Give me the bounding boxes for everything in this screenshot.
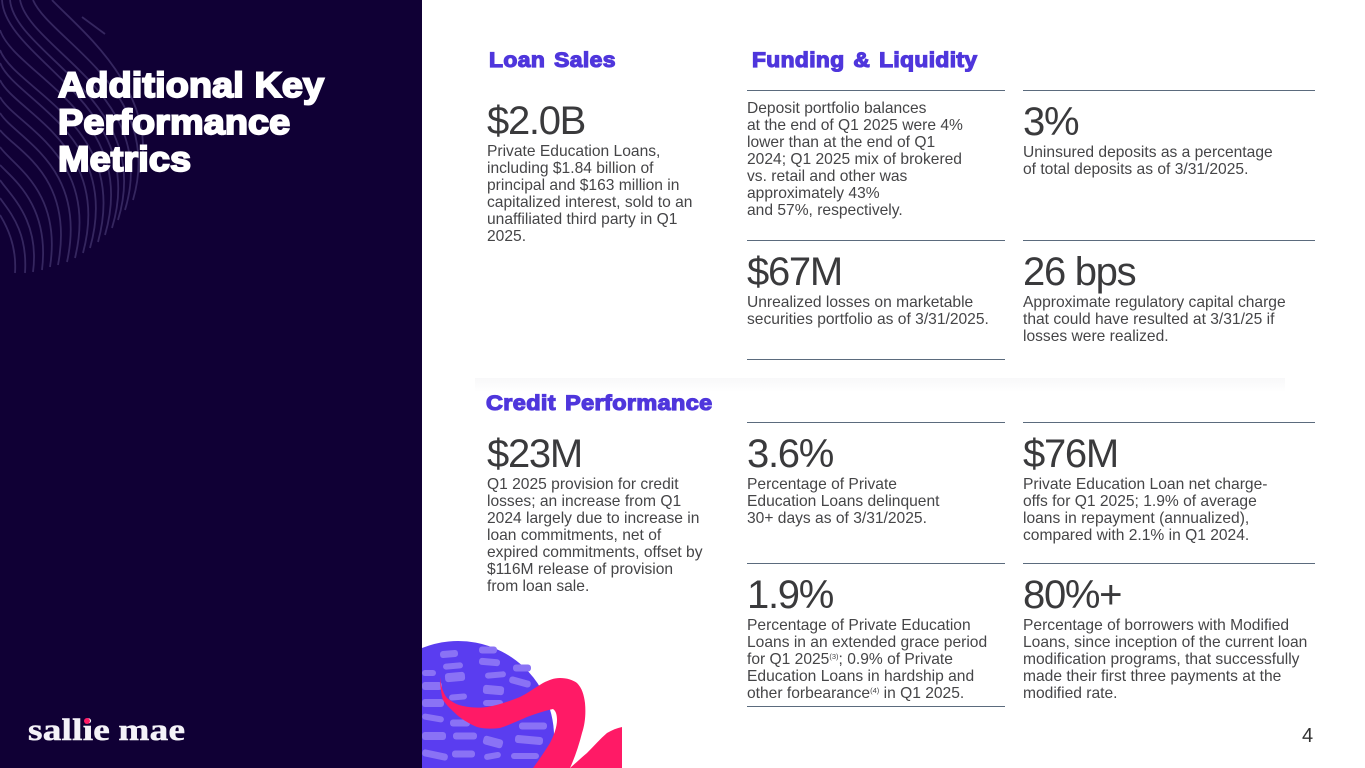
description: other forbearance(4) in Q1 2025. [747,685,964,702]
description [747,617,987,702]
description: Education Loans delinquent [747,493,939,510]
description [747,476,940,527]
description: modification programs, that successfully [1023,651,1299,668]
logo: sallie mae [28,712,185,747]
description: capitalized interest, sold to an [487,194,692,211]
metric: 3.6% delinquent [747,422,1005,527]
description: loans in repayment (annualized), [1023,510,1249,527]
title [58,66,326,179]
description: losses were realized. [1023,328,1169,345]
value: $67M [747,250,842,294]
description: offs for Q1 2025; 1.9% of average [1023,493,1257,510]
heading: Credit Performance: Credit Performance [486,392,713,415]
metric: 3% uninsured deposits [1023,90,1315,178]
metric: deposit portfolio [747,90,1005,219]
description: securities portfolio as of 3/31/2025. [747,311,989,328]
description: Loans, since inception of the current loan [1023,634,1307,651]
description: 2024 largely due to increase in [487,510,699,527]
description: Approximate regulatory capital charge [1023,294,1286,311]
value: 26 bps [1023,250,1135,294]
title: Additional Key [58,66,324,105]
description: Education Loans in hardship and [747,668,974,685]
description: Q1 2025 provision for credit [487,476,679,493]
value: 80%+ [1023,573,1121,617]
description: Private Education Loans, [487,143,660,160]
description: at the end of Q1 2025 were 4% [747,117,963,134]
section shadow divider [475,378,1285,392]
description: 2025. [487,228,526,245]
decorative wave lines [0,0,144,273]
metric: $67M unrealized losses [747,240,1005,360]
logo wordmark: sallie mae [28,712,185,747]
description [487,143,692,245]
description: for Q1 2025(3); 0.9% of Private [747,651,953,668]
value: $23M [487,432,582,476]
metric: $76M charge-offs [1023,422,1315,544]
description: Percentage of Private [747,476,897,493]
illustration: purple circle and pink brush stroke [422,641,622,768]
description: vs. retail and other was [747,168,907,185]
description: 30+ days as of 3/31/2025. [747,510,927,527]
metric: $23M provision [487,432,703,595]
description: approximately 43% [747,185,880,202]
value: 3% [1023,100,1078,144]
description: losses; an increase from Q1 [487,493,681,510]
heading: Loan Sales: Loan Sales [489,49,616,72]
description: Uninsured deposits as a percentage [1023,144,1273,161]
description: that could have resulted at 3/31/25 if [1023,311,1274,328]
description: modified rate. [1023,685,1117,702]
description: Private Education Loan net charge- [1023,476,1267,493]
description [1023,617,1307,702]
logo dot [84,718,90,724]
dark sidebar panel [0,0,422,768]
metric: 1.9% grace period [747,563,1005,707]
page number: 4 [1302,725,1313,747]
description [487,476,703,595]
title: Metrics [58,140,191,179]
description: of total deposits as of 3/31/2025. [1023,161,1248,178]
description: compared with 2.1% in Q1 2024. [1023,527,1249,544]
metric: 26 bps capital charge [1023,240,1315,345]
description: including $1.84 billion of [487,160,653,177]
description: from loan sale. [487,578,589,595]
description: principal and $163 million in [487,177,679,194]
description: Percentage of Private Education [747,617,971,634]
description: expired commitments, offset by [487,544,703,561]
description [1023,144,1273,178]
value: 1.9% [747,573,833,617]
heading: Funding & Liquidity: Funding & Liquidity [752,49,977,72]
description: and 57%, respectively. [747,202,903,219]
description [747,100,963,219]
description: loan commitments, net of [487,527,661,544]
description: unaffiliated third party in Q1 [487,211,677,228]
metric: 80%+ modified loans [1023,563,1315,702]
description: Unrealized losses on marketable [747,294,973,311]
description: $116M release of provision [487,561,673,578]
description [1023,476,1267,544]
description: made their first three payments at the [1023,668,1281,685]
description: Loans in an extended grace period [747,634,987,651]
title: Performance [58,103,290,142]
value: 3.6% [747,432,833,476]
metric: $2.0B loan sales [487,99,692,245]
description [747,294,989,328]
value: $2.0B [487,99,585,143]
description: lower than at the end of Q1 [747,134,935,151]
description: Percentage of borrowers with Modified [1023,617,1289,634]
description [1023,294,1286,345]
description: 2024; Q1 2025 mix of brokered [747,151,962,168]
description: Deposit portfolio balances [747,100,926,117]
value: $76M [1023,432,1118,476]
